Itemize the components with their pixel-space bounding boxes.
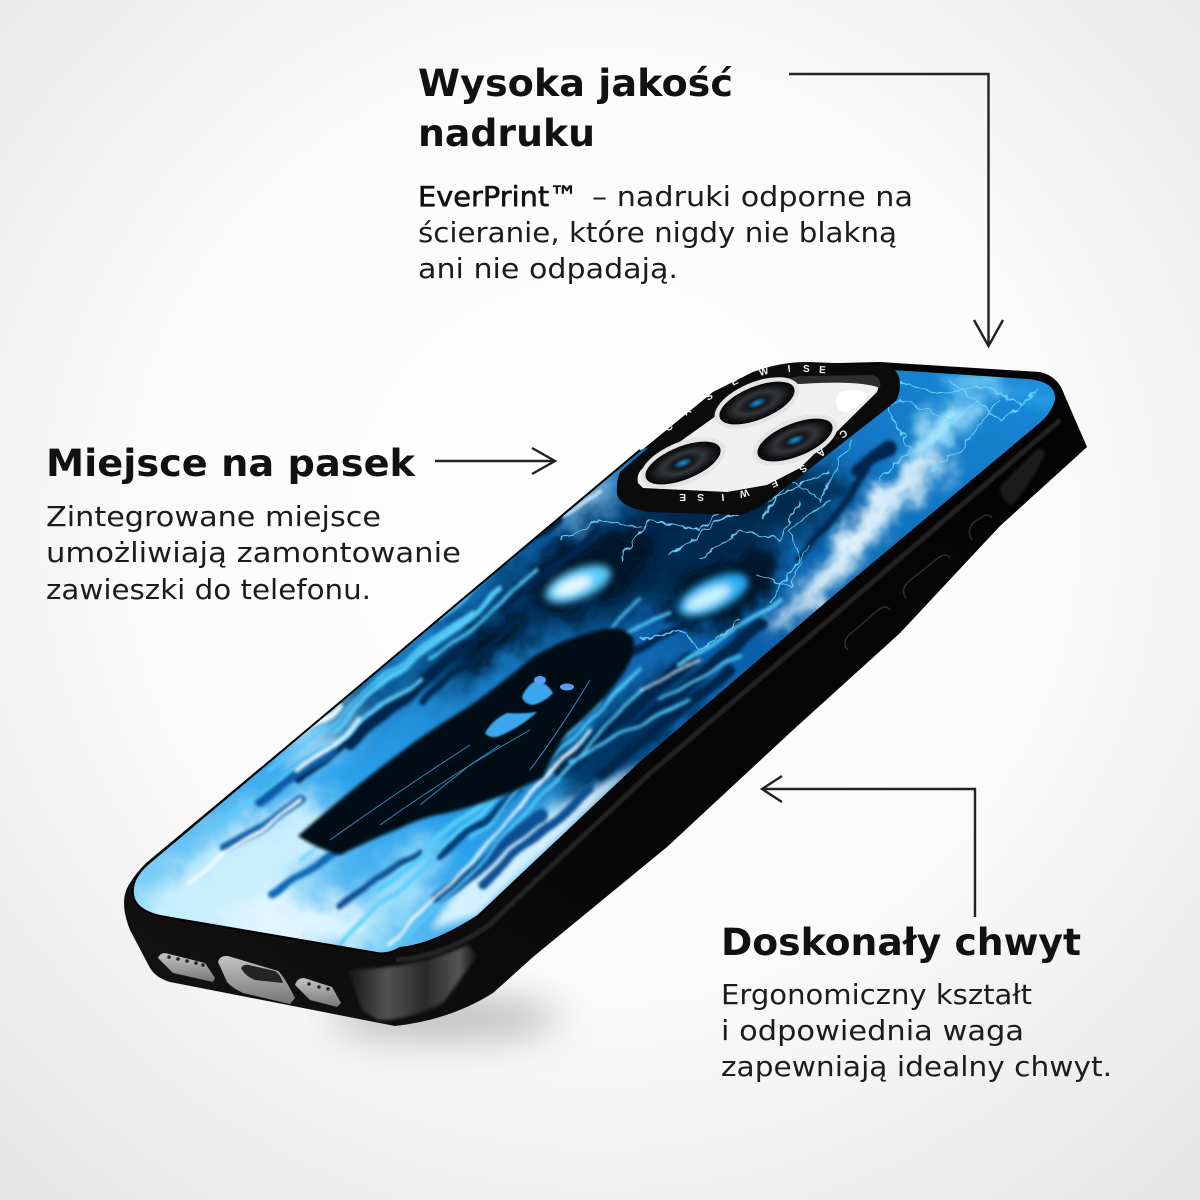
callout: strap slot: umożliwiają zamontowanie <box>46 536 461 569</box>
figure hair lines <box>330 680 590 840</box>
phone drop shadow <box>330 994 560 1042</box>
charging port <box>218 956 295 1004</box>
bottom speaker right <box>295 978 341 1007</box>
heading: Wysoka jakość <box>418 62 733 105</box>
arrow: grip <box>762 776 975 917</box>
arrow: print quality <box>789 74 1003 346</box>
hooded figure <box>298 628 634 855</box>
camera bumper <box>617 362 900 515</box>
lens lower left <box>633 427 733 499</box>
light bottom-left glow <box>134 462 629 952</box>
lens right <box>745 404 845 476</box>
lens top <box>707 367 807 439</box>
callout: print quality: nadruku <box>418 112 595 155</box>
action button <box>969 515 992 540</box>
soft colour fields <box>106 377 1053 989</box>
side strap slot <box>1000 448 1045 506</box>
skull eyes <box>540 557 754 626</box>
side buttons <box>845 515 992 650</box>
bottom speaker left <box>158 953 215 982</box>
speaker holes left <box>167 955 205 967</box>
callout: strap slot <box>46 442 461 606</box>
callout: print quality: ścieranie, które nigdy nie blakną <box>418 216 897 249</box>
flowing dark streaks <box>225 450 890 905</box>
corner sheen <box>348 945 478 1020</box>
camera ledge shadow <box>770 375 880 388</box>
brand text lower: CASEWISE <box>679 427 849 502</box>
description: Zintegrowane miejsce <box>46 500 381 533</box>
screen rim <box>133 369 1056 953</box>
brand text upper: CASEWISE <box>663 364 826 434</box>
heading: Miejsce na pasek <box>46 442 416 485</box>
speaker holes right <box>307 982 330 991</box>
callout: print quality: – nadruki odporne na <box>592 180 913 213</box>
white strip near lower edge <box>430 763 640 930</box>
electric veins <box>560 380 1040 650</box>
flowing cyan streaks <box>210 550 780 945</box>
description: Ergonomiczny kształt <box>721 978 1032 1011</box>
heading: Doskonały chwyt <box>721 921 1081 964</box>
artwork screen <box>134 370 1056 952</box>
callout: strap slot: zawieszki do telefonu. <box>46 573 371 606</box>
figure face <box>485 676 574 737</box>
glossy rim beside screen <box>396 420 1060 960</box>
callout: grip: i odpowiednia waga <box>721 1014 1024 1047</box>
phone case <box>100 340 1100 1026</box>
case body <box>124 362 1087 1026</box>
description: EverPrint™ <box>418 180 578 213</box>
callout: print quality <box>418 62 913 285</box>
callout: print quality: ani nie odpadają. <box>418 252 678 285</box>
inner glare <box>836 390 868 412</box>
light right-edge streak <box>505 377 1053 864</box>
volume button upper <box>903 555 950 598</box>
volume button lower <box>845 607 890 650</box>
white highlights <box>190 490 700 945</box>
camera plate <box>638 377 878 492</box>
camera module <box>617 362 900 515</box>
callout: grip <box>721 921 1112 1083</box>
dark skull mass <box>323 431 862 822</box>
callout: grip: zapewniają idealny chwyt. <box>721 1050 1112 1083</box>
arrow: strap slot <box>435 448 555 474</box>
